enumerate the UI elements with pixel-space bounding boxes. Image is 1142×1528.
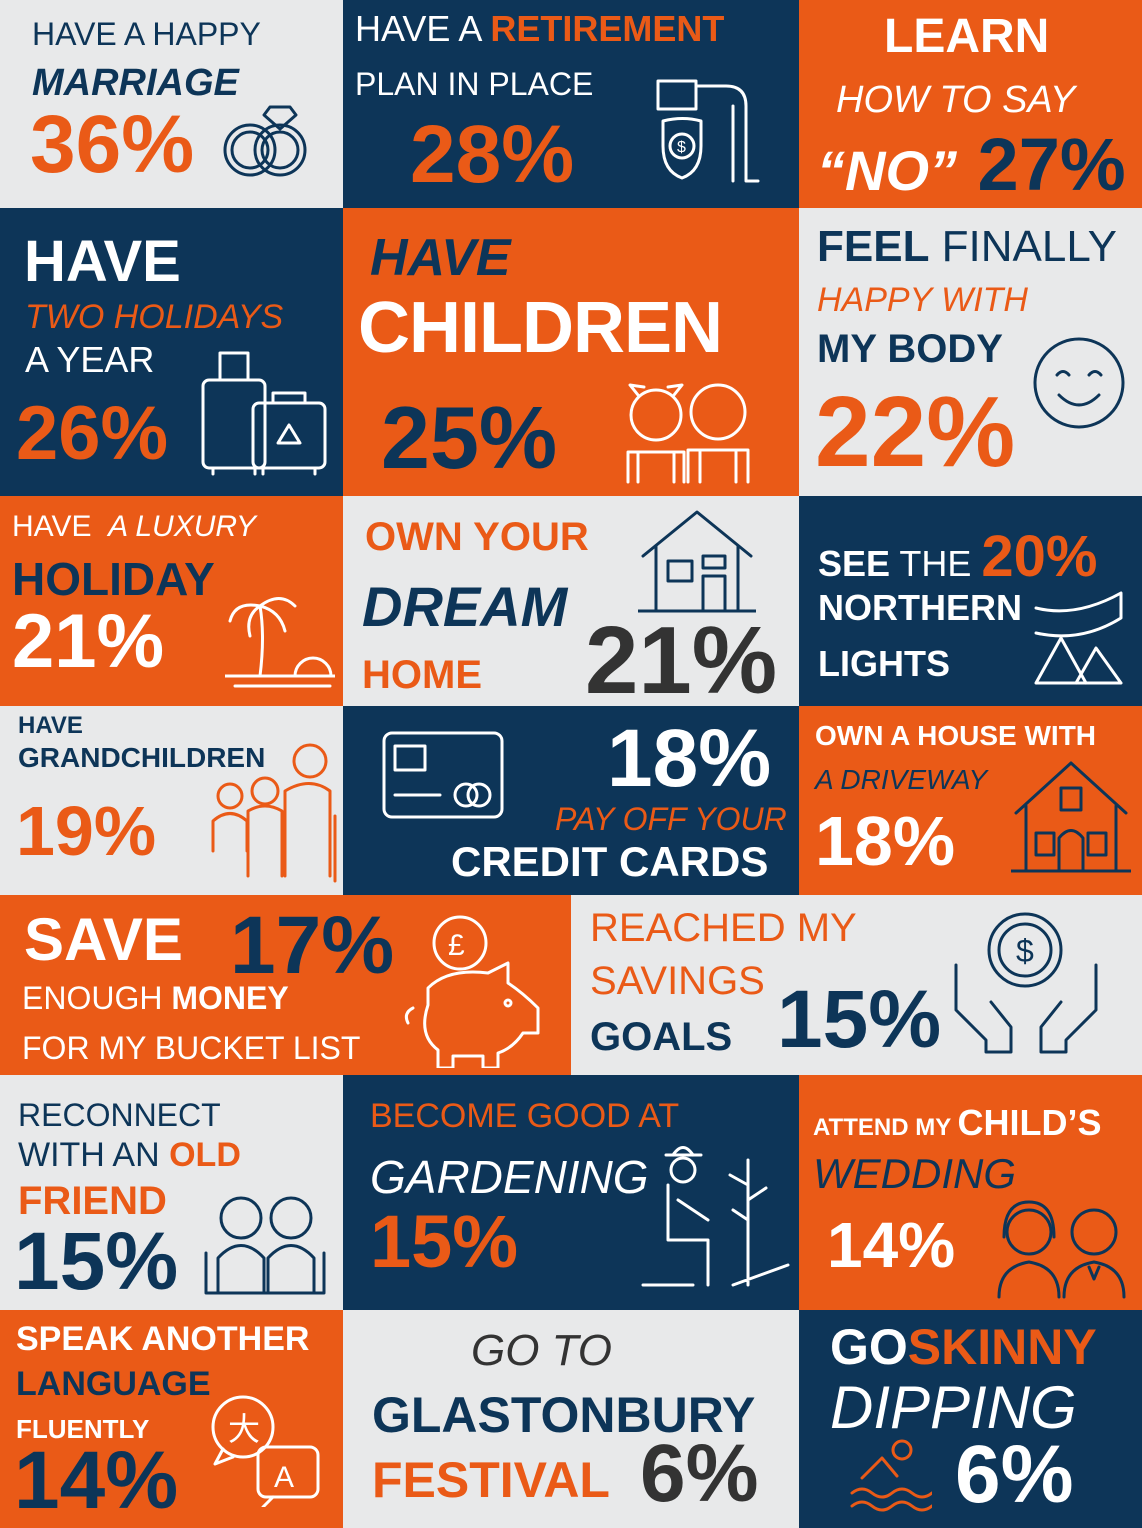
icon: hand with shield bbox=[656, 80, 760, 182]
text: for my bucket list: FOR MY BUCKET LIST bbox=[22, 1030, 360, 1066]
text: home: HOME bbox=[362, 653, 482, 697]
text: learn: LEARN bbox=[884, 10, 1049, 63]
icon: bride and groom bbox=[998, 1200, 1126, 1298]
text: a driveway: A DRIVEWAY bbox=[815, 764, 987, 795]
text: glastonbury: GLASTONBURY bbox=[372, 1387, 755, 1443]
text: reconnect: RECONNECT bbox=[18, 1097, 221, 1133]
stat: 18%: 18% bbox=[815, 802, 955, 880]
panel: glastonbury bbox=[343, 1310, 799, 1528]
panel: gardening bbox=[343, 1075, 799, 1310]
stat: 28%: 28% bbox=[410, 109, 574, 200]
icon: credit card bbox=[382, 732, 504, 818]
panel: speak another language bbox=[0, 1310, 343, 1528]
text: credit cards: CREDIT CARDS bbox=[451, 838, 768, 885]
icon: speech bubbles: 大 bbox=[228, 1404, 260, 1450]
panel: two holidays bbox=[0, 208, 343, 496]
text: have a happy: HAVE A HAPPY bbox=[32, 16, 261, 52]
text: have a luxury: HAVE A LUXURY bbox=[12, 510, 256, 543]
stat: 36%: 36% bbox=[30, 99, 194, 190]
text: dream: DREAM bbox=[362, 575, 567, 638]
panel: save for bucket list bbox=[0, 895, 571, 1075]
stat: 19%: 19% bbox=[16, 792, 156, 870]
stat: 21%: 21% bbox=[585, 607, 777, 714]
text: happy with: HAPPY WITH bbox=[817, 281, 1028, 319]
text: with an old: WITH AN OLD bbox=[18, 1136, 241, 1174]
stat: 15%: 15% bbox=[777, 974, 941, 1065]
icon: friends bbox=[204, 1196, 326, 1294]
stat: 14%: 14% bbox=[14, 1435, 178, 1526]
text: save: SAVE bbox=[24, 906, 183, 973]
panel: northern lights bbox=[799, 496, 1142, 706]
stat: 18%: 18% bbox=[607, 713, 771, 804]
panel: happy with body bbox=[799, 208, 1142, 496]
text: have a retirement: HAVE A RETIREMENT bbox=[355, 8, 724, 49]
panel: skinny dipping bbox=[799, 1310, 1142, 1528]
text: children: CHILDREN bbox=[358, 288, 722, 368]
text: my body: MY BODY bbox=[817, 327, 1003, 371]
text: a year: A YEAR bbox=[25, 339, 154, 380]
text: become good at: BECOME GOOD AT bbox=[370, 1097, 679, 1135]
text: savings: SAVINGS bbox=[590, 959, 765, 1003]
panel: have children bbox=[343, 208, 799, 496]
stat: 21%: 21% bbox=[12, 599, 164, 684]
text: plan in place: PLAN IN PLACE bbox=[355, 66, 593, 102]
icon: kids bbox=[626, 384, 750, 484]
text: have: HAVE bbox=[370, 229, 511, 287]
text: attend my child's: ATTEND MY CHILD’S bbox=[813, 1102, 1101, 1143]
icon: rings bbox=[224, 106, 306, 176]
icon: palm beach bbox=[225, 597, 335, 688]
text: go to: GO TO bbox=[471, 1326, 612, 1375]
stat: 22%: 22% bbox=[815, 376, 1015, 488]
text: festival: FESTIVAL bbox=[372, 1452, 610, 1508]
icon: speech bubbles bbox=[212, 1396, 320, 1507]
icon: hand with shield: $ bbox=[677, 139, 686, 156]
stat: 17%: 17% bbox=[230, 900, 394, 991]
text: holiday: HOLIDAY bbox=[12, 553, 215, 605]
text: own your: OWN YOUR bbox=[365, 515, 589, 559]
stat: 15%: 15% bbox=[14, 1216, 178, 1307]
text: enough money: ENOUGH MONEY bbox=[22, 980, 289, 1016]
icon: smiley bbox=[1034, 338, 1124, 428]
icon: grandparents bbox=[212, 744, 336, 882]
text: pay off your: PAY OFF YOUR bbox=[555, 801, 787, 837]
text: two holidays: TWO HOLIDAYS bbox=[25, 298, 283, 336]
stat: 6%: 6% bbox=[955, 1429, 1074, 1520]
text: dipping: DIPPING bbox=[830, 1374, 1077, 1441]
panel: happy marriage bbox=[0, 0, 343, 208]
icon: piggy bank: £ bbox=[448, 929, 465, 962]
icon: house bbox=[638, 510, 756, 612]
stat: 15%: 15% bbox=[370, 1200, 518, 1283]
text: see the 20%: SEE THE 20% bbox=[818, 524, 1098, 589]
stat: 6%: 6% bbox=[640, 1428, 759, 1519]
text: reached my: REACHED MY bbox=[590, 906, 857, 950]
panel: child's wedding bbox=[799, 1075, 1142, 1310]
icon: swimmer bbox=[850, 1440, 932, 1512]
icon: hands with coin: $ bbox=[1016, 933, 1034, 969]
text: go skinny: GOSKINNY bbox=[830, 1319, 1097, 1375]
panel: old friend bbox=[0, 1075, 343, 1310]
text: own a house with: OWN A HOUSE WITH bbox=[815, 720, 1096, 751]
icon: house bbox=[1011, 761, 1131, 872]
text: northern: NORTHERN bbox=[818, 587, 1022, 628]
text: grandchildren: GRANDCHILDREN bbox=[18, 742, 265, 773]
icon: hands with coin bbox=[954, 912, 1098, 1054]
text: no 27%: “NO” 27% bbox=[817, 123, 1126, 206]
text: lights: LIGHTS bbox=[818, 643, 950, 684]
text: how to say: HOW TO SAY bbox=[836, 79, 1075, 121]
icon: gardener bbox=[642, 1146, 790, 1286]
text: fluently: FLUENTLY bbox=[16, 1414, 149, 1444]
text: gardening: GARDENING bbox=[370, 1151, 649, 1203]
panel: house with driveway bbox=[799, 706, 1142, 895]
panel: luxury holiday bbox=[0, 496, 343, 706]
text: have: HAVE bbox=[18, 712, 83, 739]
panel: credit cards bbox=[343, 706, 799, 895]
text: marriage: MARRIAGE bbox=[32, 62, 239, 104]
text: have: HAVE bbox=[24, 229, 181, 294]
text: language: LANGUAGE bbox=[16, 1365, 211, 1403]
text: goals: GOALS bbox=[590, 1015, 732, 1059]
stat: 26%: 26% bbox=[16, 391, 168, 476]
panel: learn to say no bbox=[799, 0, 1142, 208]
text: friend: FRIEND bbox=[18, 1179, 167, 1223]
icon: speech bubbles: A bbox=[274, 1461, 294, 1494]
panel: retirement plan bbox=[343, 0, 799, 208]
icon: piggy bank bbox=[404, 916, 540, 1068]
stat: 25%: 25% bbox=[381, 388, 557, 487]
text: speak another: SPEAK ANOTHER bbox=[16, 1320, 309, 1358]
icon: luggage bbox=[202, 352, 326, 476]
panel: grandchildren bbox=[0, 706, 343, 895]
panel: dream home bbox=[343, 496, 799, 706]
text: wedding: WEDDING bbox=[813, 1150, 1016, 1197]
text: feel finally: FEEL FINALLY bbox=[817, 222, 1117, 271]
icon: mountains aurora bbox=[1034, 591, 1123, 685]
stat: 14%: 14% bbox=[827, 1209, 955, 1281]
panel: savings goals bbox=[571, 895, 1142, 1075]
